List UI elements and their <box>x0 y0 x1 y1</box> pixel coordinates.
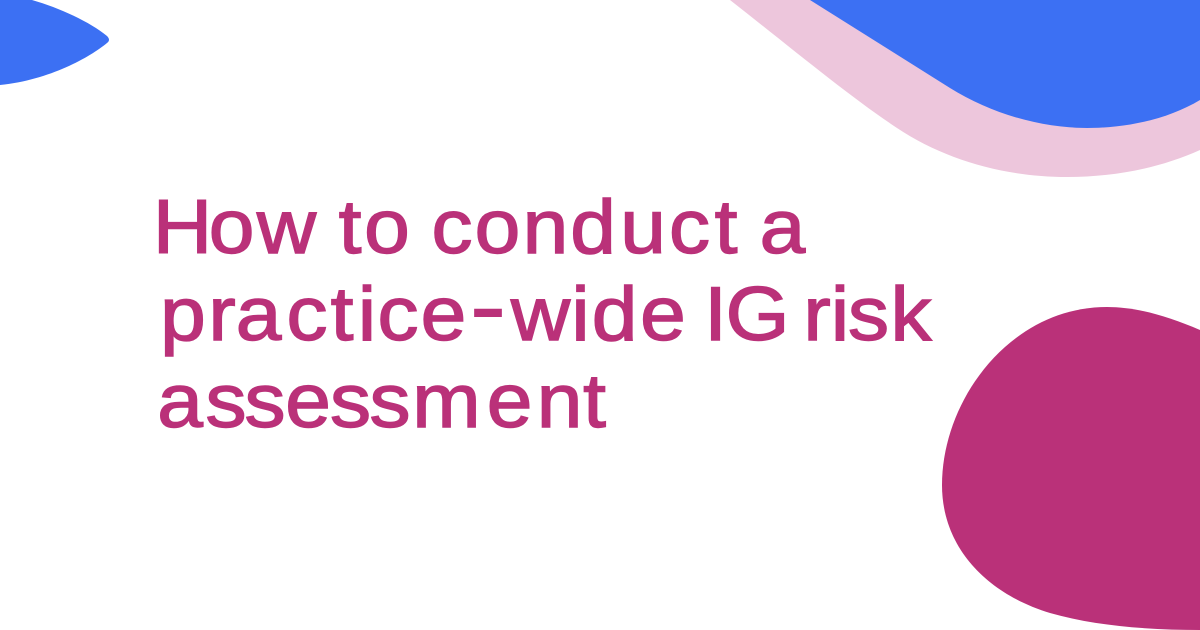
shape: blue top-right swoosh <box>810 0 1200 128</box>
title line 2: wide IG risk <box>510 271 932 356</box>
title line 2: - <box>469 247 507 364</box>
shape: magenta bottom-right blob <box>942 307 1200 630</box>
title line 1: How to conduct a <box>153 184 805 269</box>
title line 3: assessment <box>157 358 606 443</box>
shape: pink top-right swoosh <box>730 0 1200 177</box>
title line 2: practice <box>160 271 466 356</box>
shape: blue top-left blob <box>0 0 109 85</box>
